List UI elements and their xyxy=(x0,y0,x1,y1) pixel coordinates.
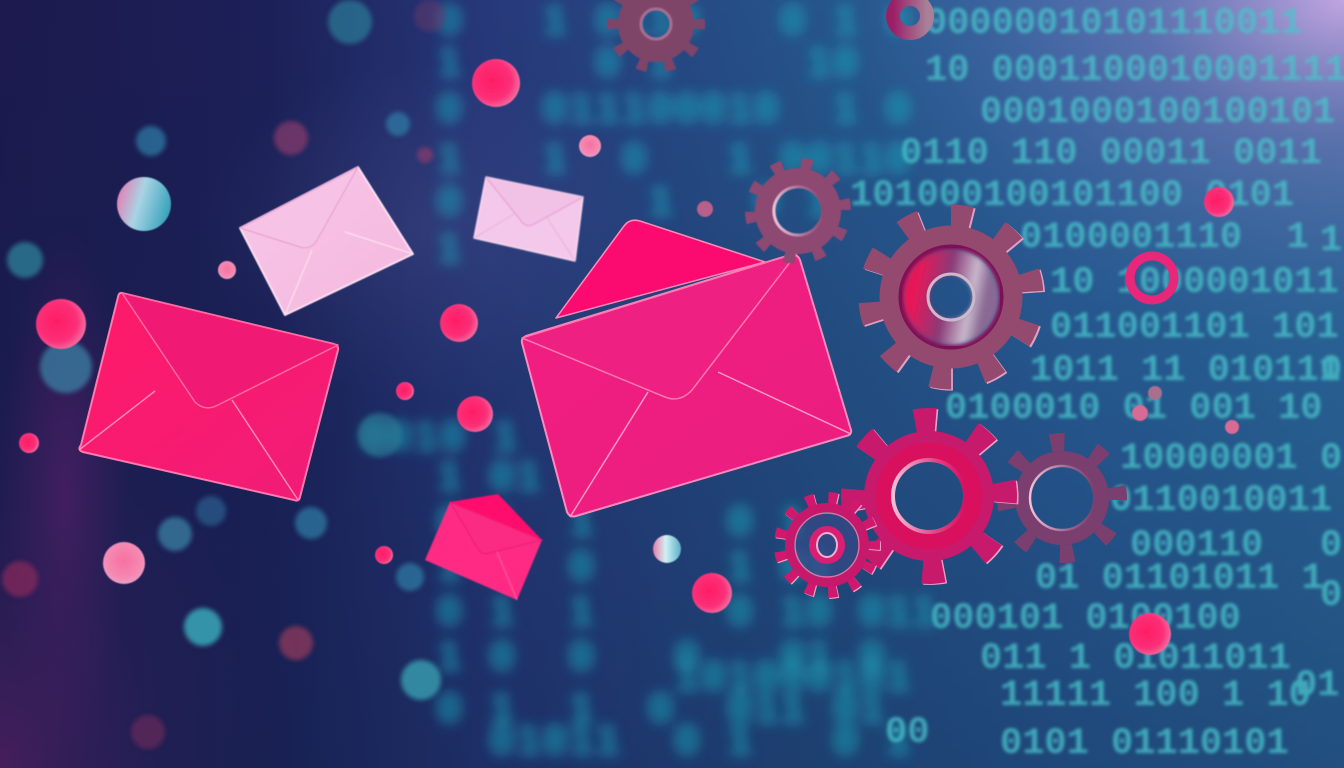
binary data: right-hand columns: 000110 xyxy=(1130,525,1263,567)
binary data: right-hand columns: 1 xyxy=(1320,220,1342,262)
binary data: blurred centre columns: 0 1 0 1 xyxy=(436,179,832,229)
small pink spheres xyxy=(19,59,1239,655)
binary data: right-hand columns: 01 xyxy=(1295,665,1339,707)
icon: pale envelope, upper left xyxy=(240,167,413,315)
binary data: blurred centre columns: 1 1 0 1 00110 xyxy=(436,136,911,186)
binary data: blurred centre columns: 0 1 1 0 011 01 xyxy=(436,686,885,736)
binary data: blurred centre columns: 1 0 0 0 01 0 xyxy=(436,634,885,684)
binary data: right-hand columns: 0 xyxy=(1320,525,1342,567)
binary data: right-hand columns: 1011 11 010111 xyxy=(1030,350,1341,392)
binary data: blurred centre columns: 0 011100010 1 0 xyxy=(436,86,911,136)
binary data: right-hand columns: 000101 0100100 xyxy=(930,598,1241,640)
icon: gear, upper middle xyxy=(746,159,850,263)
icon: small pink envelope, bottom centre xyxy=(425,494,542,600)
binary data: right-hand columns: 0100001110 1 xyxy=(1020,217,1309,259)
binary data: blurred centre columns: 1 0 0 1 01 xyxy=(436,544,832,594)
binary data: right-hand columns: 10000001 xyxy=(1120,438,1298,480)
binary data: right-hand columns: 101000100101100 0101 xyxy=(850,175,1294,217)
binary data: right-hand columns: 011 1 01011011 xyxy=(980,638,1291,680)
binary data: right-hand columns: 0100010 01 001 10 xyxy=(945,388,1322,430)
icon: large mauve gear with hub xyxy=(857,203,1047,392)
binary data: right-hand columns: 0 xyxy=(1320,438,1342,480)
binary data: blurred centre columns: 0010 1 xyxy=(360,414,518,464)
icon: magenta gear, lower right xyxy=(849,416,1010,577)
icon: small magenta gear xyxy=(780,498,875,593)
icon: ring, right xyxy=(1130,256,1174,300)
binary data: right-hand columns: 00 xyxy=(885,712,929,754)
iridescent spheres xyxy=(117,177,681,563)
binary data: blurred centre columns: 1 01 xyxy=(436,454,542,504)
binary data: blurred centre columns xyxy=(360,0,938,768)
binary data: blurred centre columns: 0 1 1 0 1 xyxy=(436,499,806,549)
binary data: right-hand columns: 0001000100100101 xyxy=(980,92,1335,134)
binary data: right-hand columns: 00000010101110011 xyxy=(925,3,1302,45)
binary data: right-hand columns: 10 0001100010001111 xyxy=(925,50,1344,92)
binary data: blurred centre columns: 0 1 1 0 10 011 xyxy=(436,589,938,639)
icon: gear, top centre xyxy=(613,0,699,67)
icon: pale envelope, top centre xyxy=(474,177,583,261)
binary data: right-hand columns: 11111 100 1 10 xyxy=(1000,675,1311,717)
binary data: right-hand columns: 0 xyxy=(1320,350,1342,392)
binary data: right-hand columns xyxy=(850,3,1344,765)
blurred bokeh dots xyxy=(2,0,446,749)
binary data: right-hand columns: 0101 01110101 xyxy=(1000,723,1289,765)
binary data: right-hand columns: 01 01101011 1 xyxy=(1035,558,1324,600)
binary data: right-hand columns: 0110010011 xyxy=(1110,480,1332,522)
icon: main large pink envelope xyxy=(522,220,851,517)
binary data: right-hand columns: 0 xyxy=(1320,575,1342,617)
binary data: blurred centre columns: 1 xyxy=(436,226,462,276)
binary data: blurred centre columns: 01011 0 1 0 1 xyxy=(436,718,911,768)
binary data: blurred centre columns: 101000101 xyxy=(436,654,911,704)
binary data: blurred centre columns: 1 0 1 10 xyxy=(436,40,885,90)
icon: large pink envelope, left xyxy=(79,293,338,501)
icon: ring, top xyxy=(893,0,927,33)
binary data: right-hand columns: 011001101 101 xyxy=(1050,307,1339,349)
binary data: right-hand columns: 0110 110 00011 0011 xyxy=(900,133,1322,175)
binary data: right-hand columns: 10 1000001011 xyxy=(1050,262,1339,304)
icon: mauve gear, far right xyxy=(1001,437,1123,559)
